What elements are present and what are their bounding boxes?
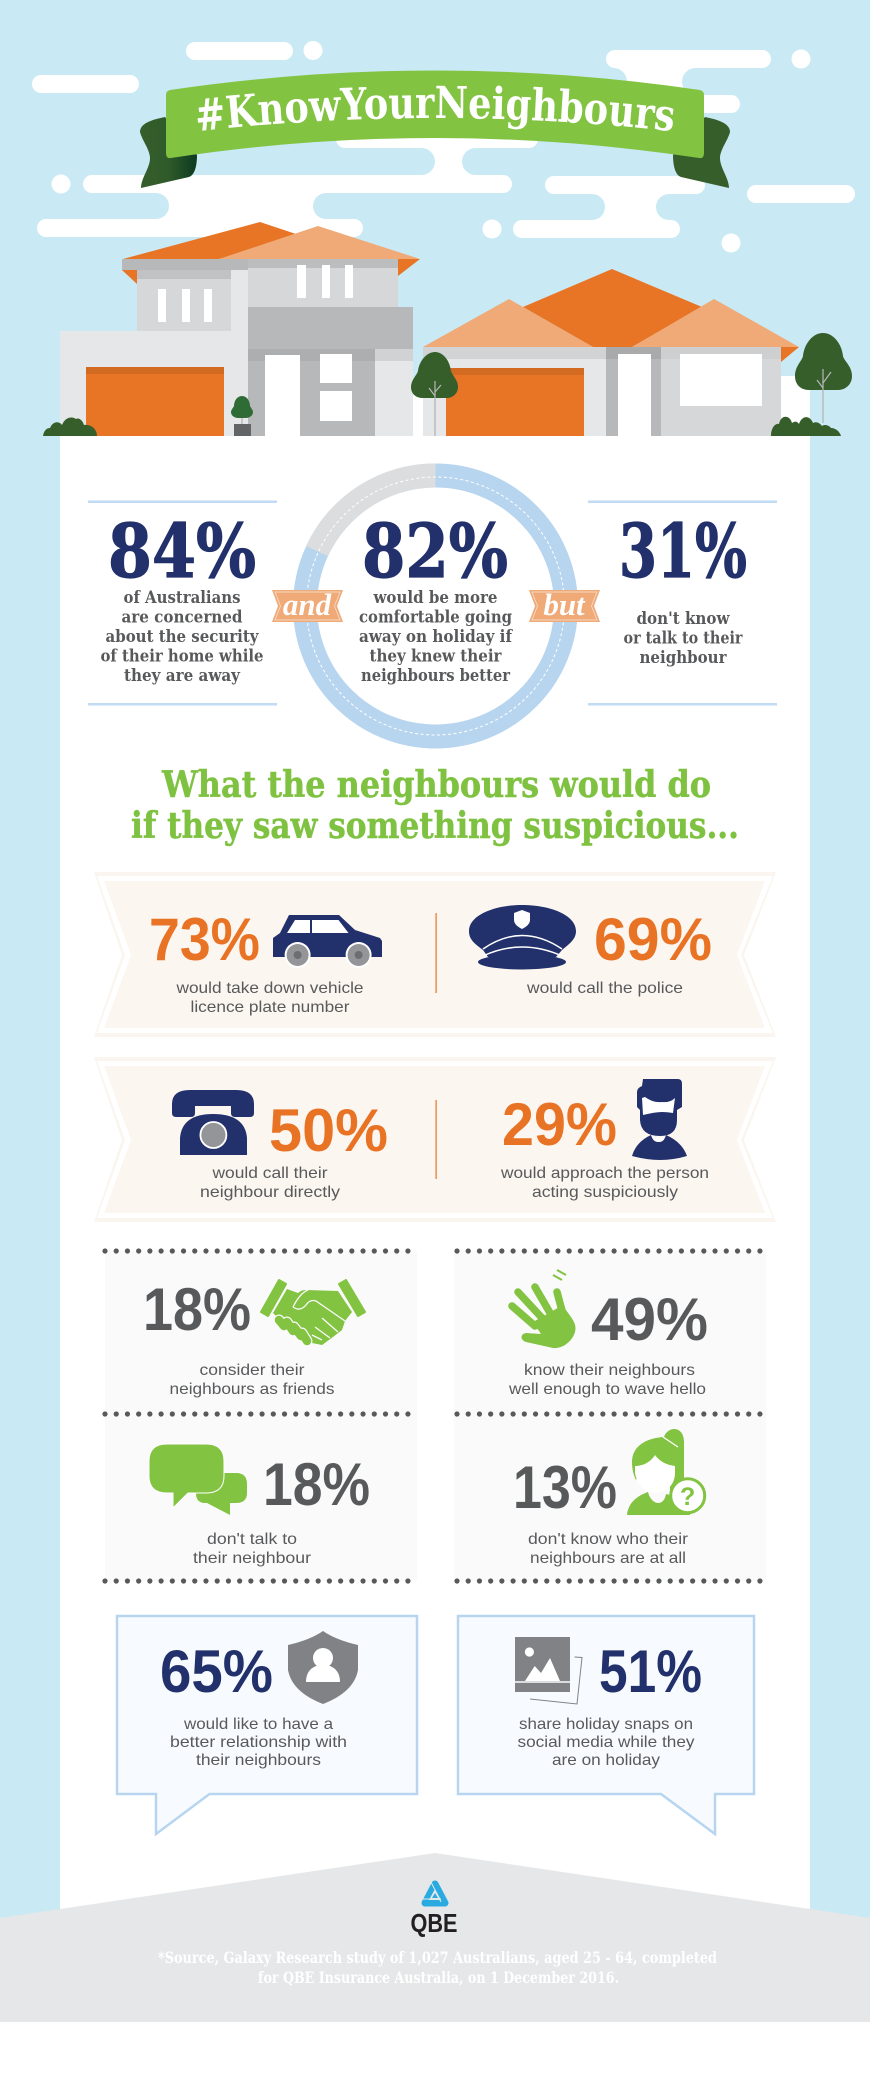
stat: 84%: are concerned [122, 608, 243, 628]
QBE logo [410, 1882, 458, 1938]
stat: 84%: of their home while [100, 646, 264, 666]
stat: 51% text: share holiday snaps on [519, 1716, 693, 1733]
stat: 29% [500, 1091, 709, 1201]
stat: 69% [526, 906, 712, 997]
stat: 29%: acting suspiciously [532, 1184, 678, 1201]
stat: 65% text: better relationship with [170, 1734, 347, 1751]
stat: 18% don't talk: 18% [263, 1451, 370, 1518]
badge: and: and [283, 587, 332, 622]
stat: 69%: would call the police [526, 980, 683, 997]
stat: 18% don't talk: their neighbour [193, 1550, 312, 1567]
ribbon panel 2 [94, 1057, 776, 1222]
icon: speech bubbles [149, 1444, 247, 1515]
stat: 73%: 73% [149, 906, 260, 973]
stat: 82%: they knew their [370, 646, 502, 666]
stat: 50%: 50% [269, 1097, 388, 1164]
icon: police cap [469, 905, 576, 970]
stat: 84%: 84% [108, 509, 256, 595]
stat: 65% text [160, 1638, 347, 1769]
stat: 50%: would call their [211, 1165, 328, 1182]
stat: 50% [200, 1097, 388, 1201]
heading [131, 764, 739, 847]
stat: 82%: would be more [373, 588, 498, 608]
stat: 31%: 31% [619, 509, 747, 595]
callout: 51% [458, 1616, 754, 1834]
light panels with dotted rules [105, 1251, 766, 1581]
source note [158, 1948, 717, 1987]
stat: 13% [513, 1454, 689, 1567]
stat: 31%: don't know [636, 609, 730, 629]
stat: 84%: about the security [106, 627, 259, 647]
source note: *Source, Galaxy Research study of 1,027 Australians, aged 25 - 64, completed [158, 1948, 717, 1967]
stat: 82%: 82% [362, 509, 508, 595]
stat: 84%: of Australians [124, 588, 240, 608]
stat: 31%: or talk to their [624, 628, 743, 648]
icon: bearded man [632, 1079, 687, 1160]
icon: woman with question mark: ? [680, 1483, 695, 1511]
stat: 51% text: are on holiday [552, 1752, 660, 1769]
stat: 65% text: their neighbours [196, 1752, 321, 1769]
stat: 18% don't talk: don't talk to [207, 1531, 297, 1548]
badge: but: but [543, 587, 586, 622]
stat: 82%: comfortable going [359, 608, 512, 628]
icon: handshake [261, 1280, 365, 1345]
heading: if they saw something suspicious... [131, 805, 739, 847]
stat: 18% friends: 18% [143, 1276, 251, 1343]
left house [60, 222, 420, 436]
QBE logo: QBE [410, 1908, 458, 1938]
stat: 65% text: would like to have a [183, 1716, 333, 1733]
stat: 29%: would approach the person [500, 1165, 709, 1182]
icon: telephone [172, 1090, 254, 1155]
stat: 73% [149, 906, 364, 1016]
stat: 18% friends: neighbours as friends [170, 1381, 334, 1398]
callout: 65% [117, 1616, 417, 1834]
stat: 18% friends [143, 1276, 334, 1398]
ribbon panel 1 [94, 872, 776, 1037]
stat: 82%: neighbours better [361, 666, 511, 686]
icon: waving hand [512, 1270, 576, 1348]
stat: 13%: don't know who their [528, 1531, 689, 1548]
ring chart 82% [305, 475, 566, 736]
stat: 18% friends: consider their [200, 1362, 305, 1379]
heading: What the neighbours would do [161, 764, 711, 806]
stat: 65% text: 65% [160, 1638, 273, 1705]
stat: 49% [508, 1286, 708, 1398]
stat: 73%: would take down vehicle [175, 980, 364, 997]
title banner [140, 70, 730, 188]
white content panel [60, 436, 810, 1926]
stat: 50%: neighbour directly [200, 1184, 340, 1201]
stat: 51% text: social media while they [518, 1734, 694, 1751]
badge: but [529, 587, 600, 622]
stat: 29%: 29% [502, 1091, 617, 1158]
stat: 13%: 13% [513, 1454, 617, 1521]
stat: 51% text [518, 1638, 702, 1769]
stat: 69%: 69% [594, 906, 712, 973]
right house [423, 269, 799, 436]
stat: 31% [619, 509, 747, 668]
stat: 84% [100, 509, 264, 686]
trees and shrubs [43, 333, 852, 436]
stat: 82% [359, 509, 513, 686]
stat: 73%: licence plate number [190, 999, 350, 1016]
stat: 31%: neighbour [640, 648, 727, 668]
stat: 84%: they are away [124, 666, 241, 686]
icon: woman with question mark [627, 1429, 705, 1515]
stat: 13%: neighbours are at all [530, 1550, 686, 1567]
stat: 49%: well enough to wave hello [508, 1381, 706, 1398]
icon: car [273, 915, 382, 968]
clouds [32, 41, 855, 252]
stat: 51% text: 51% [599, 1638, 702, 1705]
icon: photo [515, 1637, 582, 1704]
badge: and [272, 587, 343, 622]
icon: shield [288, 1631, 358, 1704]
stat: 49%: 49% [591, 1286, 708, 1353]
stat: 49%: know their neighbours [524, 1362, 695, 1379]
footer band [0, 1853, 870, 2022]
title banner: #KnowYourNeighbours [198, 86, 674, 131]
stat: 18% don't talk [193, 1451, 370, 1567]
stat: 82%: away on holiday if [359, 627, 513, 647]
source note: for QBE Insurance Australia, on 1 December 2016. [258, 1968, 619, 1987]
